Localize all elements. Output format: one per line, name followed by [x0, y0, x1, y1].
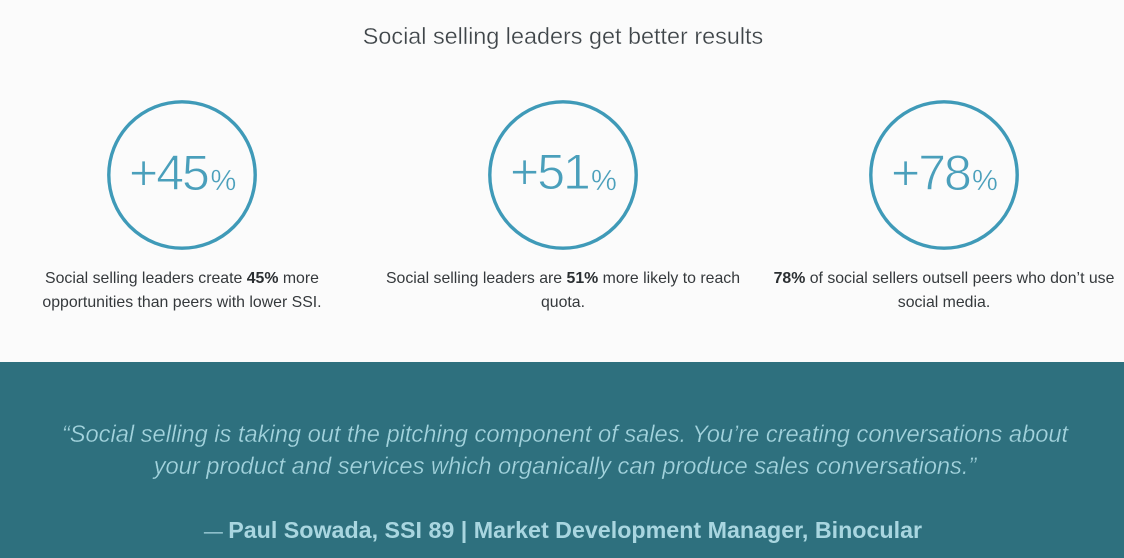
- circle: +45%: %: [210, 165, 236, 197]
- stat: +51%: [386, 100, 740, 311]
- description: +78%: [774, 270, 1114, 311]
- quote panel: [0, 362, 1124, 558]
- circle: +78%: [869, 100, 1019, 250]
- stat: +78%: [774, 100, 1114, 311]
- description: +45%: [42, 270, 322, 311]
- circle: +45%: +45: [129, 145, 208, 201]
- circle: +78%: %: [972, 165, 998, 197]
- description: +78%: 78% of social sellers outsell peers who don’t use: [774, 270, 1114, 287]
- circle: +78%: +78: [891, 145, 970, 201]
- title: Social selling leaders get better results: [363, 23, 763, 49]
- circle: +51%: [488, 100, 638, 250]
- description: +78%: social media.: [898, 294, 990, 311]
- quote text: “Social selling is taking out the pitching component of sales. You’re creating conversations about: [62, 422, 1068, 448]
- quote text: [62, 422, 1069, 480]
- description: +51%: [386, 270, 740, 311]
- description: +45%: opportunities than peers with lower SSI.: [42, 294, 322, 311]
- stat: +45%: [42, 100, 322, 311]
- description: +45%: Social selling leaders create 45% more: [45, 270, 319, 287]
- quote text: your product and services which organically can produce sales conversations.”: [154, 454, 976, 480]
- description: +51%: Social selling leaders are 51% more likely to reach: [386, 270, 740, 287]
- circle: +51%: %: [591, 165, 617, 197]
- circle: +45%: [107, 100, 257, 250]
- description: +51%: quota.: [541, 294, 585, 311]
- circle: +51%: +51: [510, 144, 589, 200]
- attribution: — Paul Sowada, SSI 89 | Market Development Manager, Binocular: [204, 517, 922, 543]
